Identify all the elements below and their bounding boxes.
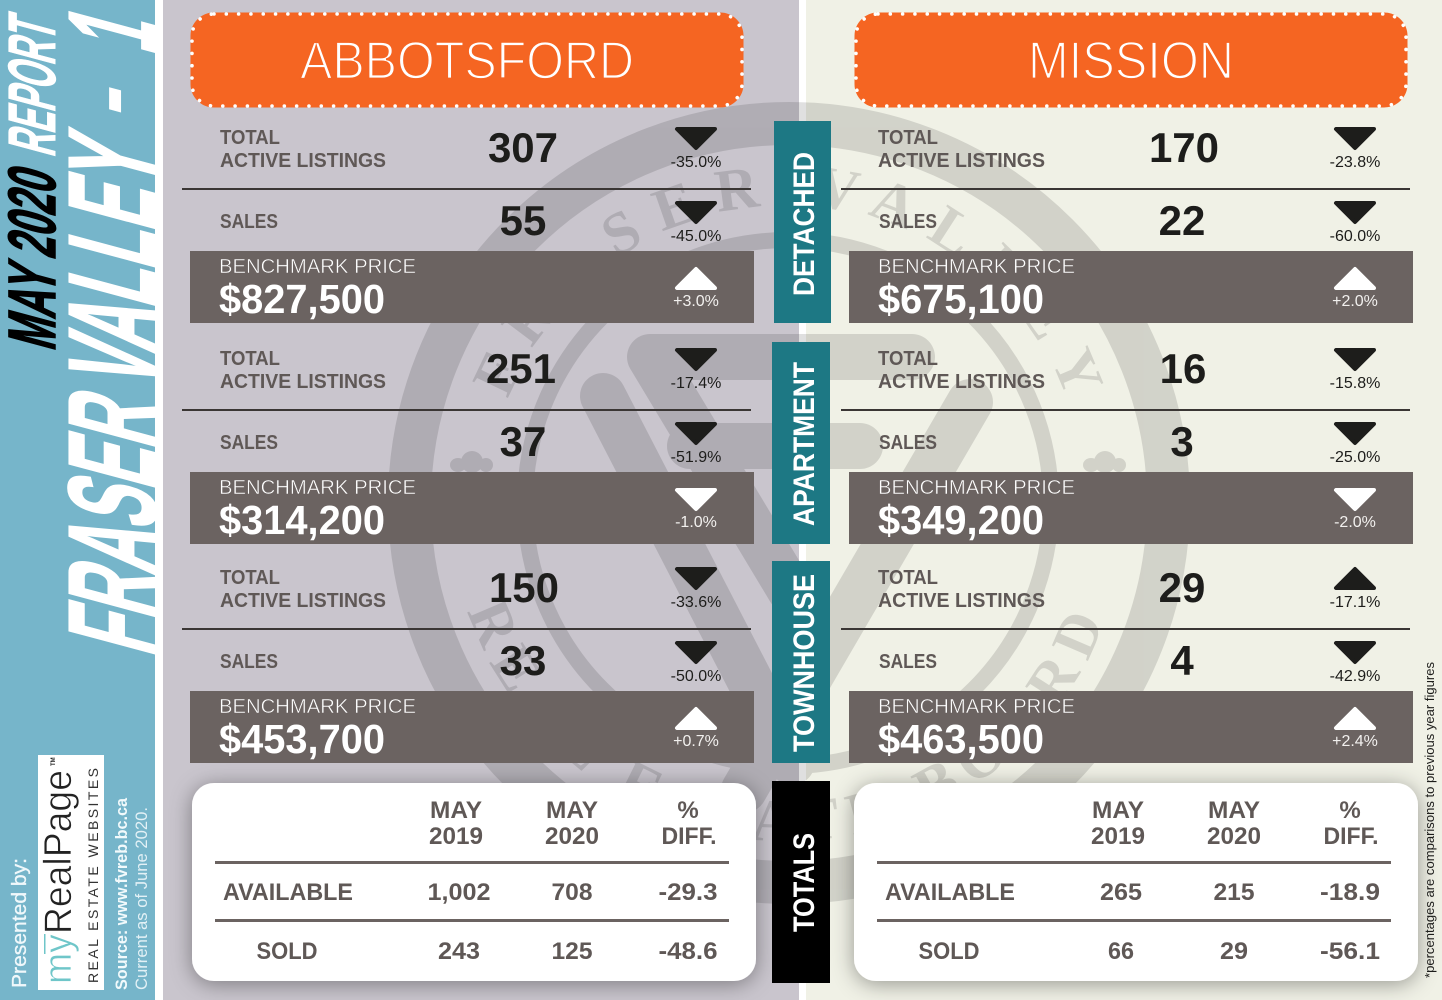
tab: Apartment [772,342,830,544]
panel: benchmark price: BENCHMARK PRICE [878,255,1075,278]
label: sales: SALES [220,651,278,673]
column header: percent diff: % [677,797,699,824]
label: total active listings: TOTAL [878,567,938,589]
column header: May 2020: MAY [1208,797,1260,824]
panel: benchmark price: -2.0% [1334,514,1376,531]
panel: benchmark price: BENCHMARK PRICE [219,476,416,499]
panel: Abbotsford detached [182,124,754,323]
panel: Mission detached [841,124,1413,323]
tab: Detached [774,121,831,323]
percent: sales: -50.0% [671,668,721,685]
panel: left sidebar [0,0,155,1000]
row: sold [256,938,718,965]
row: sold: SOLD [256,938,318,965]
title: Fraser Valley - 1: - [51,68,163,127]
value: sales: 22 [1159,197,1205,244]
panel: Mission townhouse [841,564,1413,763]
text: current date: Current as of June 2020. [132,807,151,990]
panel: benchmark price: BENCHMARK PRICE [219,255,416,278]
percent: sales: -51.9% [671,449,721,466]
value: sales: 4 [1170,637,1194,684]
header: Abbotsford: ABBOTSFORD [300,32,634,90]
column header: May 2019: 2019 [1091,823,1145,850]
icon: down arrow [677,424,715,443]
percent: listings: -33.6% [671,594,721,611]
panel: benchmark price: -1.0% [675,514,717,531]
label: total active listings: ACTIVE LISTINGS [220,590,386,612]
icon: up arrow [1336,569,1374,588]
column header: May 2020 [545,797,599,850]
panel: benchmark price [190,472,754,544]
label: total active listings: ACTIVE LISTINGS [878,590,1045,612]
value: listings: 29 [1159,564,1205,611]
column header: May 2020: 2020 [1207,823,1261,850]
percent: listings: -17.1% [1330,594,1380,611]
logo: myRealPage: myRealPage [37,770,80,984]
icon: down arrow [677,569,715,588]
tab: Apartment: APARTMENT [788,362,821,526]
row: available: AVAILABLE [885,879,1015,906]
text: presented by: Presented by: [9,858,31,988]
panel: benchmark price: $453,700 [219,716,385,762]
header: Mission [856,14,1406,106]
column header: May 2019 [1091,797,1145,850]
icon: down arrow [677,350,715,369]
row: sold: 125 [552,938,592,965]
panel: Abbotsford townhouse [182,564,754,763]
panel: benchmark price: +3.0% [673,293,719,310]
panel: benchmark price [849,472,1413,544]
column header: percent diff: DIFF. [662,823,716,850]
label: sales: SALES [879,651,937,673]
label: total active listings: ACTIVE LISTINGS [878,150,1045,172]
row: sold: SOLD [918,938,980,965]
panel: benchmark price: BENCHMARK PRICE [219,695,416,718]
panel: Abbotsford totals table [192,783,756,981]
label: total active listings: TOTAL [878,348,938,370]
column header: May 2019 [429,797,483,850]
label: total active listings: TOTAL [220,127,280,149]
label: total active listings: TOTAL [220,348,280,370]
percent: sales: -60.0% [1330,228,1380,245]
value: sales: 33 [500,637,546,684]
column header: May 2019: MAY [430,797,482,824]
label: sales: SALES [879,432,937,454]
value: sales: 3 [1170,418,1194,465]
row: sold: -48.6 [658,938,718,965]
label: total active listings [878,127,1045,172]
panel: benchmark price: $675,100 [878,276,1044,322]
panel: benchmark price: +2.4% [1332,733,1378,750]
percent: listings: -35.0% [671,154,721,171]
logo: myRealPage: TM [51,757,57,766]
icon: down arrow [1336,203,1374,222]
watermark: Fraser Valley Real Estate Board seal: REAL ESTATE BOARD [467,602,1098,840]
panel: Mission totals table [854,783,1418,981]
value: sales: 55 [500,197,546,244]
label: total active listings: ACTIVE LISTINGS [878,371,1045,393]
percent: sales: -45.0% [671,228,721,245]
column header: May 2019: 2019 [429,823,483,850]
footnote: *percentages are comparisons to previous year figures [1423,662,1437,978]
column header: percent diff [662,797,716,850]
panel: benchmark price: $827,500 [219,276,385,322]
row: sold [918,938,1380,965]
text: source: Source: www.fvreb.bc.ca [112,797,131,990]
panel: benchmark price: +2.0% [1332,293,1378,310]
row: available: 265 [1100,879,1142,906]
percent: sales: -25.0% [1330,449,1380,466]
icon: down arrow [1336,424,1374,443]
row: available: -18.9 [1320,879,1380,906]
panel: benchmark price: $349,200 [878,497,1044,543]
icon: down arrow [677,203,715,222]
label: sales: SALES [220,432,278,454]
column header: percent diff: % [1339,797,1361,824]
value: listings: 170 [1149,124,1219,171]
column header: percent diff: DIFF. [1324,823,1378,850]
label: sales: SALES [879,211,937,233]
label: total active listings [220,567,386,612]
logo: myRealPage [37,755,104,990]
tab: Totals: TOTALS [788,833,821,932]
row: sold: 29 [1220,938,1248,965]
column header: May 2020 [1207,797,1261,850]
tab: Townhouse [772,561,830,763]
panel: benchmark price: $463,500 [878,716,1044,762]
row: sold: 243 [438,938,480,965]
panel: Abbotsford apartment [182,345,754,544]
tab: Detached: DETACHED [788,152,821,296]
column header: May 2019: MAY [1092,797,1144,824]
row: available [885,879,1380,906]
panel: benchmark price [849,691,1413,763]
icon: down arrow [1336,350,1374,369]
tab: Totals [772,781,830,983]
header: Abbotsford [192,14,742,106]
label: total active listings: ACTIVE LISTINGS [220,150,386,172]
column header: May 2020: MAY [546,797,598,824]
icon: down arrow [1336,643,1374,662]
percent: listings: -15.8% [1330,375,1380,392]
label: total active listings [220,348,386,393]
panel: benchmark price: +0.7% [673,733,719,750]
panel: benchmark price [849,251,1413,323]
header: Mission: MISSION [1028,32,1234,90]
percent: listings: -23.8% [1330,154,1380,171]
watermark: Fraser Valley Real Estate Board seal [389,102,1189,904]
percent: sales: -42.9% [1330,668,1380,685]
label: total active listings: TOTAL [220,567,280,589]
row: available: 708 [552,879,592,906]
row: available: -29.3 [658,879,718,906]
icon: down arrow [677,129,715,148]
row: sold: -56.1 [1320,938,1380,965]
panel: benchmark price: BENCHMARK PRICE [878,476,1075,499]
value: listings: 16 [1160,345,1206,392]
panel: benchmark price [190,691,754,763]
title: Fraser Valley - 1 [67,10,155,654]
value: listings: 150 [489,564,559,611]
tab: Townhouse: TOWNHOUSE [788,574,821,752]
row: available: 215 [1214,879,1254,906]
label: sales: SALES [220,211,278,233]
panel: benchmark price [190,251,754,323]
watermark: Fraser Valley Real Estate Board seal: FRASER VALLEY [472,168,1104,398]
value: sales: 37 [500,418,546,465]
icon: down arrow [677,643,715,662]
logo: myRealPage: REAL ESTATE WEBSITES [85,768,101,983]
label: total active listings: ACTIVE LISTINGS [220,371,386,393]
row: available: 1,002 [428,879,490,906]
label: total active listings [878,348,1045,393]
column header: percent diff [1324,797,1378,850]
label: total active listings [878,567,1045,612]
row: available [223,879,718,906]
row: available: AVAILABLE [223,879,353,906]
label: total active listings [220,127,386,172]
value: listings: 307 [488,124,558,171]
percent: listings: -17.4% [671,375,721,392]
panel: benchmark price: $314,200 [219,497,385,543]
row: sold: 66 [1108,938,1134,965]
panel: Mission apartment [841,345,1413,544]
panel: benchmark price: BENCHMARK PRICE [878,695,1075,718]
icon: down arrow [1336,129,1374,148]
column header: May 2020: 2020 [545,823,599,850]
title: Fraser Valley - 1: FRASER [43,376,182,665]
value: listings: 251 [486,345,556,392]
label: total active listings: TOTAL [878,127,938,149]
